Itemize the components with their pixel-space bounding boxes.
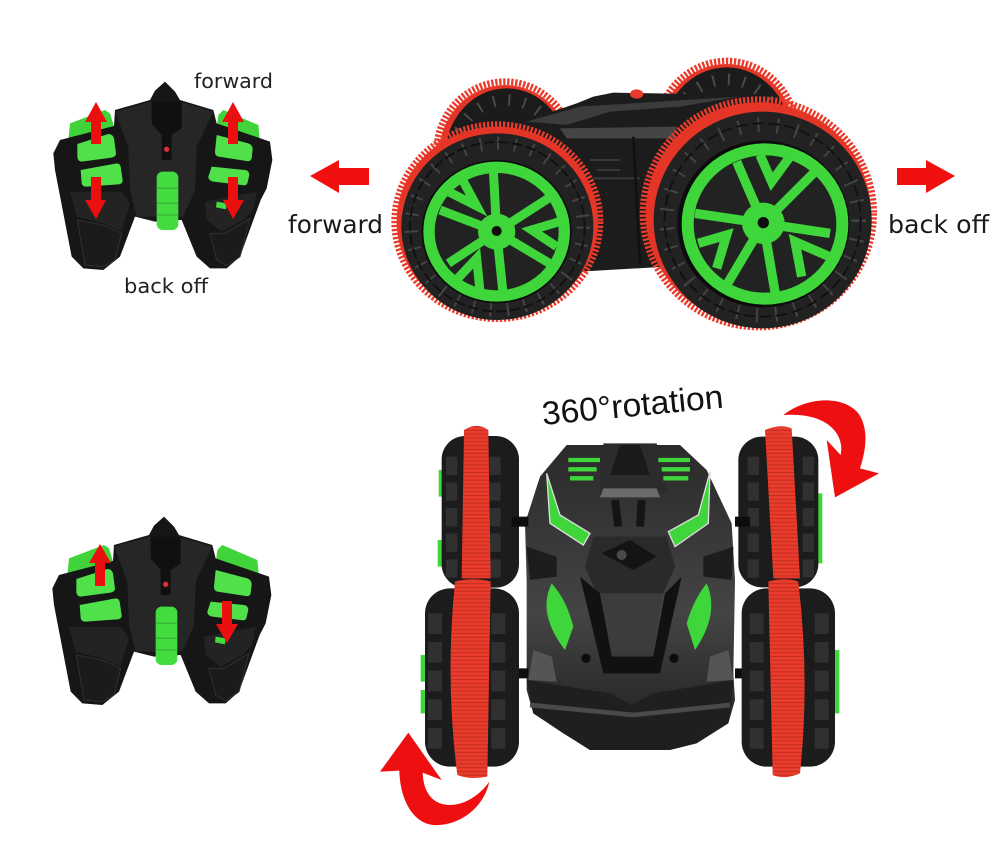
icon: remote controller body (53, 82, 272, 270)
front left wheel (423, 579, 519, 778)
back left wheel (441, 426, 519, 588)
body (523, 89, 747, 272)
green side stripes (547, 473, 590, 545)
label: car forward: forward (288, 210, 383, 239)
label: car back off: back off (888, 210, 990, 239)
arrow: left stick forward (89, 544, 111, 586)
green side lights (546, 583, 573, 650)
back left wheel (437, 82, 573, 225)
green rim (429, 167, 565, 297)
label: remote back off: back off (124, 274, 209, 298)
arrow: left stick back (85, 177, 106, 219)
panel: lower remote controller with opposing arrows (52, 517, 271, 705)
back right wheel (738, 426, 820, 587)
green rim (688, 149, 842, 302)
arrow: clockwise rotation top right (783, 400, 879, 497)
illustration: bottom car front view (380, 400, 879, 825)
back right wheel (656, 61, 797, 213)
body (508, 443, 750, 750)
arrow: left stick forward (85, 102, 107, 144)
front left wheel (395, 125, 600, 320)
title: 360 rotation label: 360°rotation (540, 378, 725, 432)
arrow: right stick back (216, 601, 238, 643)
arrow: car moves right (897, 160, 955, 193)
illustration: top car side view (395, 61, 874, 328)
centre hood (585, 537, 675, 593)
panel: top remote controller with forward and back off arrows (53, 82, 272, 270)
arrow: right stick forward (222, 102, 244, 144)
front right wheel (643, 100, 874, 328)
icon: remote controller body (52, 517, 271, 705)
front right wheel (742, 579, 837, 777)
green vents (568, 460, 690, 478)
arrow: rotation bottom left (380, 733, 489, 825)
arrow: car moves left (310, 160, 369, 193)
arrow: right stick back (223, 177, 244, 219)
label: remote forward: forward (194, 69, 273, 93)
